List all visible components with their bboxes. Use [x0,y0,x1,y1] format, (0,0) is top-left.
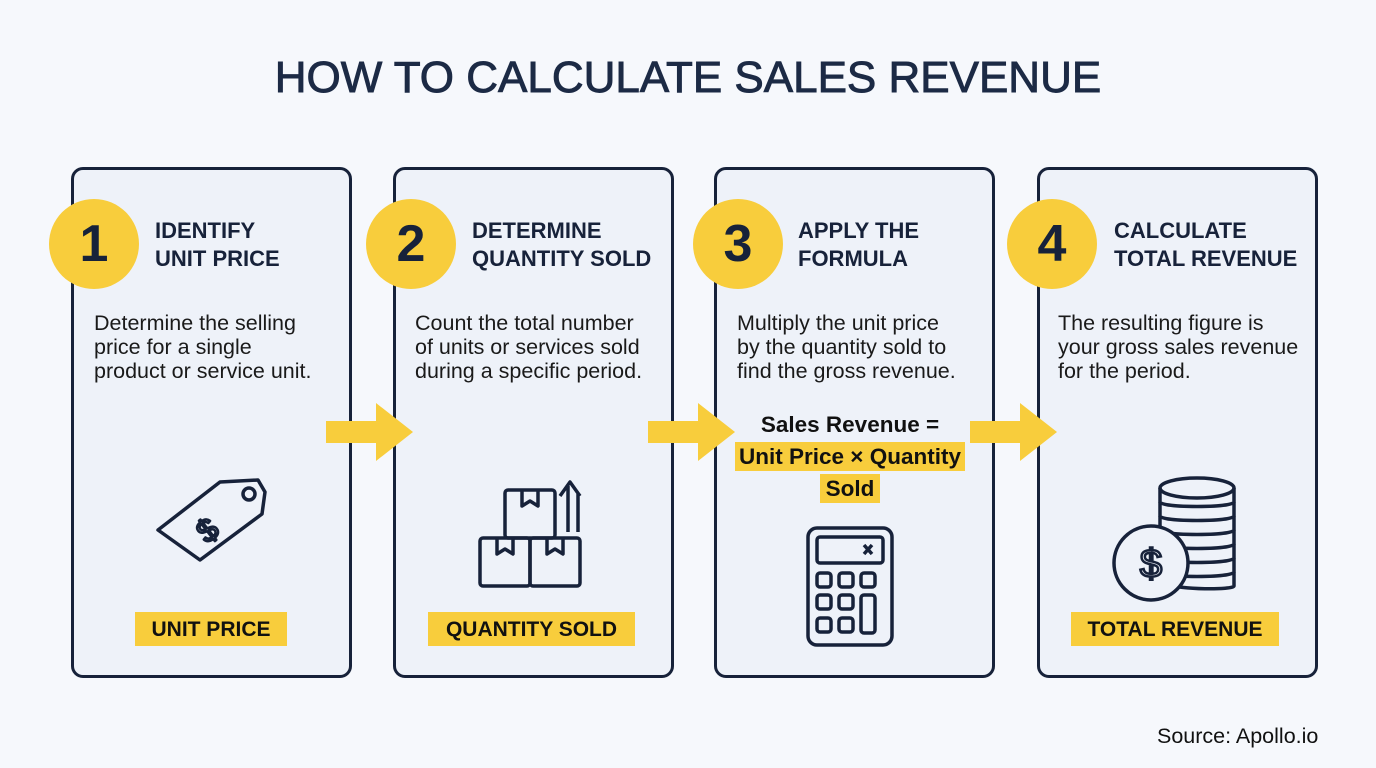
title: HOW TO CALCULATE SALES REVENUE [275,53,1101,102]
heading 1 [155,218,280,271]
icon: price tag: $ [189,510,226,550]
label 4 [1071,612,1279,646]
icon: price tag [156,478,267,562]
panel: step 3 [714,167,995,678]
text 1: product or service unit. [94,359,312,383]
formula: Sold [826,476,874,501]
text 1: price for a single [94,335,252,359]
heading 3 [798,218,919,271]
icon: coins [1112,476,1236,602]
heading 3: APPLY THE [798,218,919,243]
label 4: TOTAL REVENUE [1087,618,1263,641]
text 3 [737,311,956,383]
number 2: 2 [397,215,425,273]
text 1: Determine the selling [94,311,296,335]
formula [735,412,965,503]
label 2: QUANTITY SOLD [446,618,617,641]
heading 4: CALCULATE [1114,218,1247,243]
formula: Unit Price × Quantity [739,444,961,469]
heading 2: DETERMINE [472,218,602,243]
source: Source: Apollo.io [1157,724,1318,748]
icon: boxes [478,480,582,588]
number 1: 1 [80,215,108,273]
text 4 [1058,311,1298,383]
text 3: by the quantity sold to [737,335,946,359]
number 2 [366,199,456,289]
number 4 [1007,199,1097,289]
formula: Sales Revenue = [761,412,939,437]
number 1 [49,199,139,289]
icon: calculator [806,526,894,647]
text 2 [415,311,642,383]
arrow 1 [326,403,413,461]
heading 2 [472,218,651,271]
text 2: of units or services sold [415,335,640,359]
panel: step 2 [393,167,674,678]
heading 4 [1114,218,1297,271]
heading 4: TOTAL REVENUE [1114,246,1297,271]
label 1 [135,612,287,646]
text 1 [94,311,312,383]
text 3: find the gross revenue. [737,359,956,383]
text 3: Multiply the unit price [737,311,939,335]
panel: step 4 [1037,167,1318,678]
icon: coins: $ [1140,542,1162,586]
label 1: UNIT PRICE [151,618,270,641]
text 2: Count the total number [415,311,634,335]
heading 2: QUANTITY SOLD [472,246,651,271]
heading 3: FORMULA [798,246,908,271]
text 2: during a specific period. [415,359,642,383]
number 3 [693,199,783,289]
label 2 [428,612,635,646]
panel: step 1 [71,167,352,678]
text 4: The resulting figure is [1058,311,1264,335]
text 4: your gross sales revenue [1058,335,1298,359]
number 3: 3 [724,215,752,273]
heading 1: UNIT PRICE [155,246,280,271]
arrow 2 [648,403,735,461]
heading 1: IDENTIFY [155,218,255,243]
text 4: for the period. [1058,359,1191,383]
number 4: 4 [1038,215,1066,273]
arrow 3 [970,403,1057,461]
